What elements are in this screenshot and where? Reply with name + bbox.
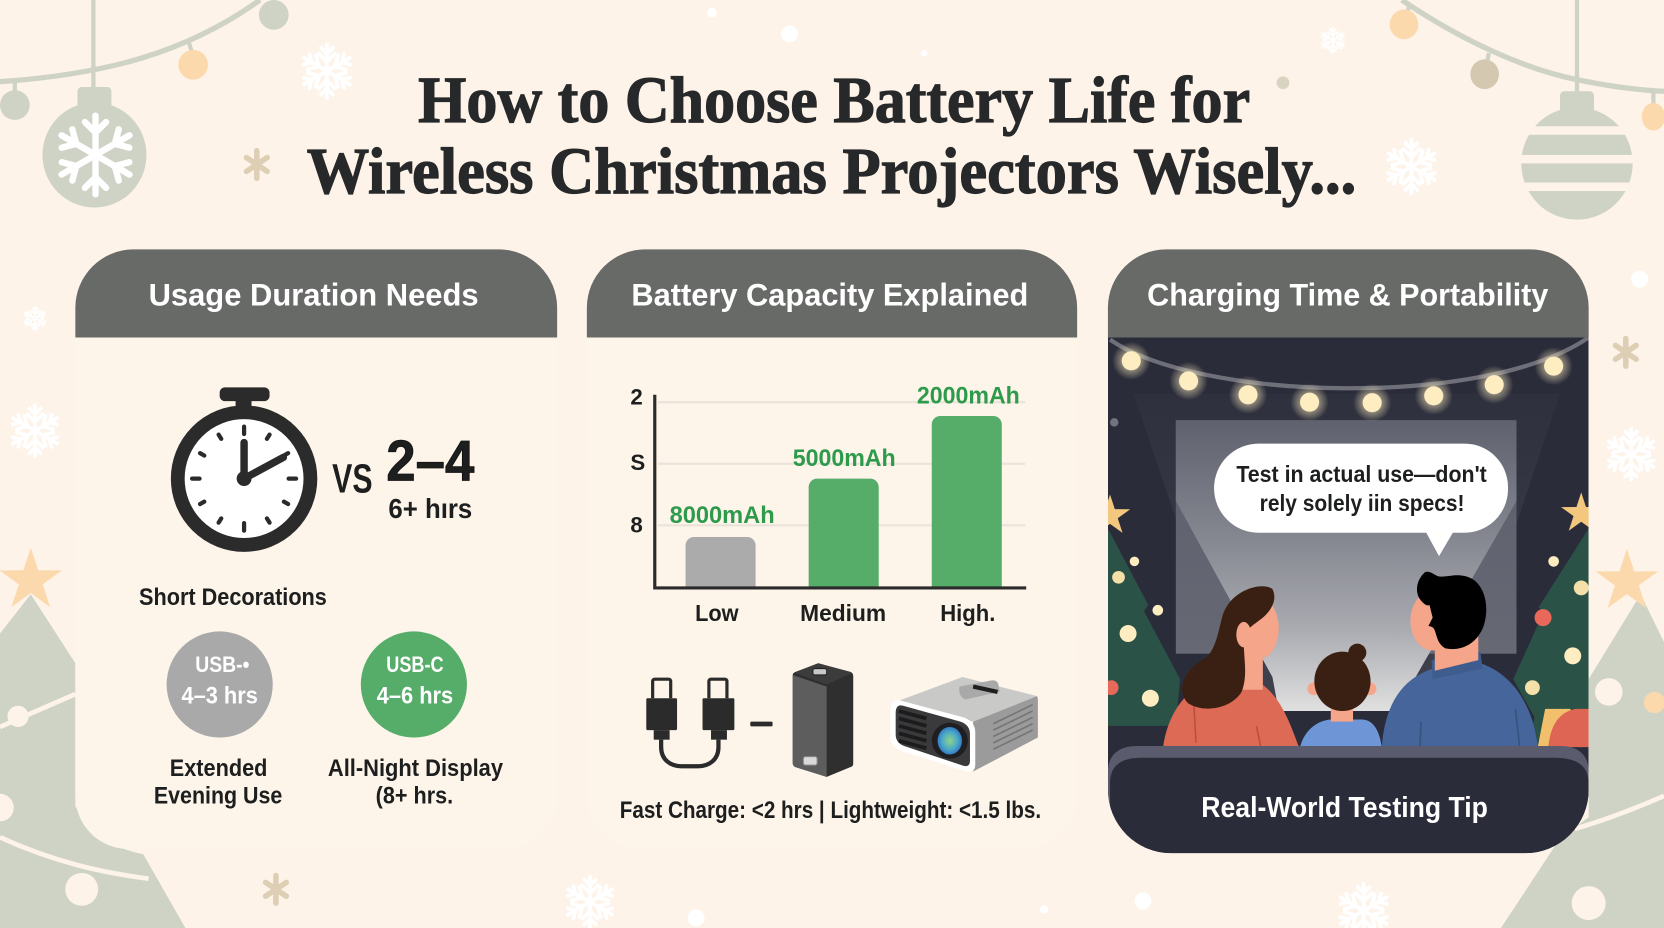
speech bubble: rely solely iin specs! [1260,490,1464,516]
axis numbers [630,384,645,538]
category labels: Medium [800,600,886,626]
badge: usb-c green: 4–6 hrs [377,683,453,710]
child [1300,644,1382,747]
category labels [695,600,995,626]
panel header [1108,249,1589,337]
category labels: High. [940,600,995,626]
left tree [1108,494,1180,726]
panel body [75,337,557,849]
gift boxes [1538,709,1571,747]
axis numbers: S [630,450,645,475]
real-world testing tip caption: Real-World Testing Tip [1201,792,1488,824]
man [1382,572,1538,747]
right tree [1514,492,1589,748]
projection screen [1176,420,1516,654]
title: Wireless Christmas Projectors Wisely... [307,135,1356,208]
speech bubble [1214,444,1508,556]
string lights [1110,337,1589,427]
hours comparison [386,430,474,524]
vs label: VS [332,455,372,501]
hours comparison: 2–4 [386,430,474,494]
badge: usb grey: USB-• [195,652,250,677]
icon: usb cable [646,679,734,766]
extended evening use label [154,755,282,809]
all-night display label [328,755,503,809]
bar chart [630,382,1026,626]
woman [1163,586,1299,747]
heading: Usage Duration Needs [149,277,479,313]
badge: usb grey: 4–3 hrs [181,683,258,710]
heading: Battery Capacity Explained [631,277,1028,313]
badge: usb-c green [361,631,467,738]
right christmas tree [1501,549,1664,928]
title [307,64,1356,208]
icon: projector [890,677,1038,772]
extended evening use label: Evening Use [154,782,282,809]
heading: Charging Time & Portability [1147,277,1549,313]
panel: battery capacity explained [587,249,1077,849]
bar value labels [670,382,1020,529]
bar value labels: 8000mAh [670,502,775,529]
badge: usb grey [167,631,273,738]
right top garland with striped ornament [1390,0,1664,220]
axis numbers: 8 [630,513,643,538]
all-night display label: All-Night Display [328,755,503,782]
all-night display label: (8+ hrs. [376,782,453,809]
left christmas tree [0,548,186,928]
charging and weight caption: Fast Charge: <2 hrs | Lightweight: <1.5 lbs. [620,797,1041,824]
speech bubble: Test in actual use—don't [1236,461,1487,487]
axis numbers: 2 [630,384,643,409]
green bar high [932,416,1002,588]
left top garland with ornament [0,0,289,207]
icon: stopwatch [178,387,310,545]
sofa back [1108,746,1589,853]
green bar medium [809,479,879,588]
panel: usage duration needs [75,249,557,849]
bar value labels: 2000mAh [917,382,1020,409]
panel body [587,337,1077,849]
hours comparison: 6+ hırs [388,493,472,524]
grey bar low [686,537,756,588]
panel header [587,249,1077,337]
illustration: family watching projector [1090,337,1601,853]
bar value labels: 5000mAh [793,445,896,472]
panel: charging time and portability [1090,249,1601,853]
short decorations label: Short Decorations [139,584,327,611]
icon: power bank [793,663,853,777]
extended evening use label: Extended [170,755,267,782]
dash between icons [750,722,773,726]
title: How to Choose Battery Life for [418,64,1250,137]
badge: usb-c green: USB-C [386,652,444,677]
category labels: Low [695,600,739,626]
panel header [75,249,557,337]
